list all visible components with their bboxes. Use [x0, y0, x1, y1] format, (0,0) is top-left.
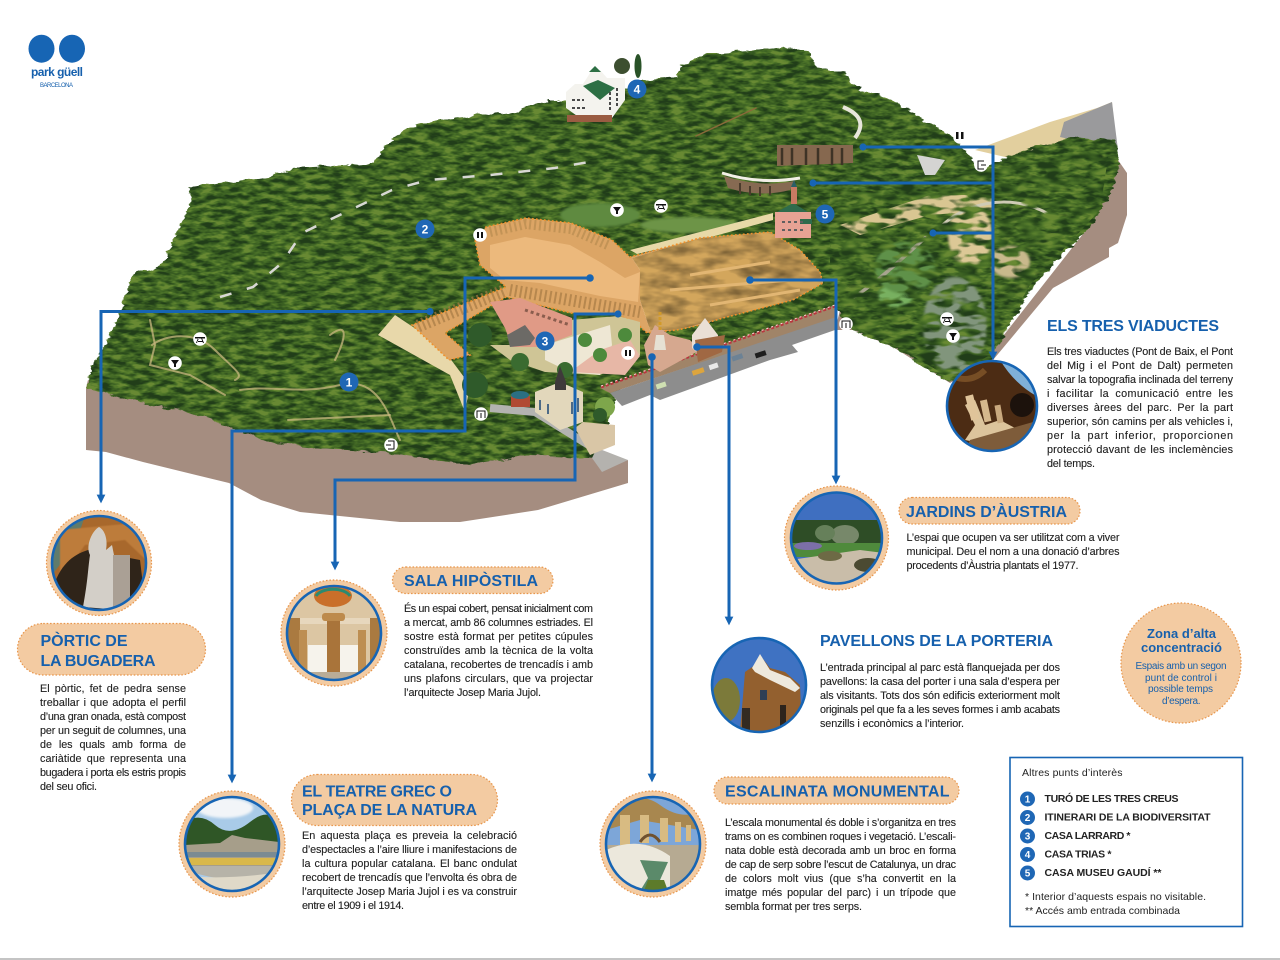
heading: El Teatre Grec o Plaça de la Natura: EL TEATRE GREC O	[302, 784, 452, 800]
text: Pòrtic description: del seu ofici.	[40, 781, 97, 793]
icon: entrance	[474, 407, 488, 421]
legend item 3	[1020, 828, 1131, 844]
building: gatehouses	[644, 310, 725, 372]
heading: Escalinata Monumental	[714, 777, 959, 804]
panel: Sala Hipòstila	[281, 567, 594, 699]
building: Antoni Gaudí school	[511, 366, 615, 455]
legend item 4: 4	[1025, 850, 1031, 861]
legend item 2	[1020, 810, 1211, 825]
badge 3	[536, 332, 554, 350]
badge 1: 1	[346, 376, 353, 390]
panel: El Teatre Grec o Plaça de la Natura	[179, 774, 517, 912]
text: Jardins description: municipal. Deu el nom a una donació d’arbres	[906, 546, 1120, 558]
text: Escalinata description: sembla format per tres serps.	[725, 901, 862, 913]
legend item 2: ITINERARI DE LA BIODIVERSITAT	[1044, 812, 1211, 824]
text: viaductes description: del temps.	[1047, 458, 1095, 470]
text: Pavellons description: pavellons: la casa del porter i una sala d’espera per	[820, 676, 1060, 688]
icon: toilets	[621, 346, 635, 360]
building: Casa Trias	[566, 54, 642, 122]
photo: gardens	[784, 486, 888, 590]
logo: park güell: BARCELONA	[40, 83, 73, 89]
icon: toilets	[473, 228, 487, 242]
icon: entrance	[839, 317, 853, 331]
legend item 5: CASA MUSEU GAUDÍ **	[1044, 866, 1162, 879]
badge 5: 5	[822, 208, 829, 222]
text: viaductes description: i facilitar la comunicació entre les	[1047, 388, 1234, 400]
badge 4: 4	[634, 82, 641, 96]
text: Escalinata description: de colors molt vius (que s’ha convertit en la	[725, 873, 956, 885]
callout: Zona d'alta concentració: concentració	[1141, 640, 1222, 655]
text: Teatre description: l’arquitecte Josep Maria Jujol i es va construir	[302, 886, 517, 898]
terrain: brown strip, right	[835, 160, 1127, 383]
heading: Escalinata Monumental: ESCALINATA MONUMENTAL	[725, 784, 950, 800]
number badges on the map	[340, 80, 834, 392]
text: Pavellons description	[820, 662, 1061, 730]
text: Pòrtic description: treballar i que adopta el perfil	[40, 697, 186, 709]
legend item 3: 3	[1025, 832, 1031, 842]
leader line: Pavellons de la Porteria	[693, 343, 729, 621]
legend: altres punts d'interès: Altres punts d’interès	[1022, 767, 1122, 779]
icon: exit	[384, 438, 398, 452]
panel: Escalinata Monumental	[600, 777, 959, 913]
text: Jardins description: procedents d’Àustria plantats el 1977.	[906, 559, 1078, 572]
text: viaductes description: salvar la topografia inclinada del terreny	[1047, 374, 1234, 386]
text: Teatre description: d’espectacles a l’aire lliure i manifestacions de	[302, 844, 517, 856]
heading: El Teatre Grec o Plaça de la Natura	[292, 774, 498, 826]
heading: Jardins d'Àustria: JARDINS D’ÀUSTRIA	[906, 502, 1067, 521]
logo: park güell	[28, 35, 85, 89]
panel: Pavellons de la Porteria	[712, 633, 1061, 732]
legend item 3: CASA LARRARD *	[1044, 830, 1131, 842]
viaducts	[722, 107, 860, 196]
road: grey walkway to the lower gate	[490, 408, 600, 452]
ramp: lower gate walkway	[592, 448, 628, 472]
legend item 1	[1020, 792, 1178, 806]
leader line: Escalinata Monumental	[648, 353, 656, 778]
badge 1	[340, 372, 358, 392]
trees over the right-hand clearings	[830, 145, 1110, 378]
area: Teatre Grec and Jardins d'Àustria, high concentration	[412, 218, 823, 360]
heading: Pòrtic de la Bugadera	[18, 624, 206, 675]
icon: fountain	[610, 203, 624, 217]
legend item 1: 1	[1025, 794, 1031, 806]
text: Teatre description: recobert de trencadís que l’envolta és obra de	[302, 872, 517, 884]
icon: fountain	[946, 329, 960, 343]
text: Sala description: catalana, recobertes de trencadís i amb	[404, 659, 593, 671]
legend item 4	[1020, 847, 1112, 862]
text: Sala description	[404, 602, 594, 699]
text: Teatre description	[302, 830, 517, 912]
text: Pòrtic description: El pòrtic, fet de pedra sense	[40, 683, 186, 695]
callout: Zona d'alta concentració: d’espera.	[1162, 696, 1200, 707]
icon: picnic area	[940, 312, 954, 326]
text: Escalinata description	[725, 817, 957, 913]
icon: picnic area	[654, 199, 668, 213]
panel: Els tres viaductes	[946, 318, 1234, 470]
text: Pòrtic description: cariàtide que representa una	[40, 753, 186, 765]
text: Pavellons description: als visitants. Tots dos són edificis exteriorment molt	[820, 690, 1060, 702]
heading: Sala Hipòstila	[392, 567, 553, 594]
heading: Sala Hipòstila: SALA HIPÒSTILA	[404, 571, 538, 590]
heading: Pòrtic de la Bugadera: PÒRTIC DE	[40, 631, 128, 650]
icon: toilets	[953, 130, 967, 144]
badge 3: 3	[542, 334, 549, 348]
callout: Zona d'alta concentració: punt de control i	[1145, 673, 1217, 684]
badge 2	[416, 220, 434, 238]
text: viaductes description: diverses àrees del parc. Per la part	[1047, 402, 1233, 414]
text: Sala description: És un espai cobert, pensat inicialment com	[404, 602, 593, 615]
photo: dragon stairway	[600, 791, 706, 897]
text: Pavellons description: senzills i econòmics a l’interior.	[820, 718, 964, 730]
text: Sala description: l’arquitecte Josep Maria Jujol.	[404, 687, 541, 699]
leader line: Jardins d'Àustria	[746, 276, 836, 480]
text: Sala description: sostre està format per petites cúpules	[404, 631, 594, 643]
legend notes: ** Accés amb entrada combinada	[1025, 905, 1180, 917]
text: viaductes description: protecció davant de les inclemències	[1047, 444, 1234, 456]
photo: columns hall	[281, 580, 387, 686]
text: Jardins description	[906, 532, 1120, 572]
forest canopy	[88, 47, 1120, 465]
legend item 1: TURÓ DE LES TRES CREUS	[1044, 792, 1178, 805]
legend item 5: 5	[1025, 868, 1031, 880]
building: Casa Larrard and plaza	[462, 298, 640, 398]
logo: park güell: park güell	[31, 65, 83, 79]
text: Pòrtic description	[40, 683, 187, 793]
text: Sala description: uns plafons circulars, que va projectar	[404, 673, 593, 685]
legend item 2: 2	[1025, 813, 1031, 824]
text: Pòrtic description: bugadera i porta els estris propis	[40, 767, 187, 779]
text: viaductes description: per la part inferior, proporcionen	[1047, 430, 1233, 442]
road: Carrer d'Olot with cars	[600, 305, 836, 406]
badge 4	[628, 80, 646, 98]
legend item 5	[1020, 866, 1162, 880]
callout: Zona d'alta concentració: Espais amb un segon	[1136, 661, 1226, 672]
text: Teatre description: entre el 1909 i el 1914.	[302, 900, 404, 912]
legend notes	[1025, 891, 1206, 917]
leader line: Sala Hipòstila	[335, 310, 622, 566]
photo: viaduct arcade	[946, 360, 1040, 452]
badge 2: 2	[422, 222, 429, 236]
heading: Els tres viaductes: ELS TRES VIADUCTES	[1047, 318, 1219, 335]
badge 5	[816, 204, 834, 224]
legend: altres punts d'interès	[1010, 758, 1242, 926]
leader line: Teatre Grec	[232, 274, 594, 779]
text: viaductes description: del Mig i el Pont de Dalt) permeten	[1047, 360, 1233, 372]
text: viaductes description	[1047, 346, 1234, 470]
text: Escalinata description: trams on es combinen roques i vegetació. L’escali-	[725, 831, 956, 843]
text: Pòrtic description: per un seguit de columnes, una	[40, 725, 186, 737]
text: Sala description: construïdes amb la tècnica de la volta	[404, 645, 593, 657]
map: aerial view of the park	[86, 47, 1127, 522]
building: Casa Museu Gaudí	[775, 180, 812, 238]
panel: Jardins d'Àustria	[784, 486, 1120, 590]
text: Pavellons description: L’entrada principal al parc està flanquejada per dos	[820, 662, 1061, 674]
text: Escalinata description: imatge més popular del parc) i un trípode que	[725, 887, 956, 899]
heading: Jardins d'Àustria	[899, 498, 1080, 524]
icon: fountain	[168, 356, 182, 370]
heading: Pavellons de la Porteria: PAVELLONS DE LA PORTERIA	[820, 633, 1053, 650]
text: viaductes description: superior, són camins per als vehicles i,	[1047, 416, 1233, 428]
text: Pavellons description: originals pel que fa a les seves formes i amb acabats	[820, 704, 1061, 716]
service icons on the map	[168, 130, 988, 452]
text: Sala description: a mercat, amb 86 columnes estriades. El	[404, 617, 593, 629]
text: Pòrtic description: d’una gran onada, està compost	[40, 711, 186, 723]
light groves	[560, 203, 1030, 373]
leader lines: Els tres viaductes	[809, 143, 993, 356]
leader line: Pòrtic de la Bugadera	[101, 308, 434, 499]
callout: Zona d'alta concentració	[1121, 603, 1241, 723]
icon: picnic area	[193, 332, 207, 346]
text: Escalinata description: L’escala monumental és doble i s’organitza en tres	[725, 817, 957, 829]
legend item 4: CASA TRIAS *	[1044, 848, 1112, 860]
legend notes: * Interior d’aquests espais no visitable.	[1025, 891, 1206, 903]
text: Teatre description: En aquesta plaça es preveia la celebració	[302, 830, 517, 842]
text: Teatre description: la cultura popular catalana. El banc ondulat	[302, 858, 517, 870]
terrain: brown base, left and front	[86, 380, 628, 522]
text: viaductes description: Els tres viaductes (Pont de Baix, el Pont	[1047, 346, 1233, 358]
photo: gatehouse	[712, 638, 806, 732]
photo: mosaic bench	[179, 791, 285, 897]
callout: Zona d'alta concentració: Zona d’alta	[1147, 626, 1217, 641]
road: grey-white upper track	[220, 160, 600, 297]
text: Escalinata description: de cap de serp sobre l’escut de Catalunya, un drac	[725, 859, 957, 871]
callout: Zona d'alta concentració: possible temps	[1148, 684, 1213, 695]
photo: caryatid column	[46, 510, 152, 616]
heading: Pòrtic de la Bugadera: LA BUGADERA	[40, 653, 156, 670]
heading: El Teatre Grec o Plaça de la Natura: PLAÇA DE LA NATURA	[302, 802, 477, 819]
panel: Pòrtic de la Bugadera	[18, 510, 206, 793]
bottom edge strip	[0, 958, 1280, 960]
text: Escalinata description: nata doble està decorada amb un broc en forma	[725, 845, 956, 857]
text: Pòrtic description: de les quals amb forma de	[40, 739, 186, 751]
text: Jardins description: L’espai que ocupen va ser utilitzat com a viver	[906, 532, 1120, 544]
paths: sand tracks	[150, 108, 1050, 440]
icon: exit	[974, 158, 988, 172]
terrain: upper right sand and grey slope	[975, 102, 1118, 165]
